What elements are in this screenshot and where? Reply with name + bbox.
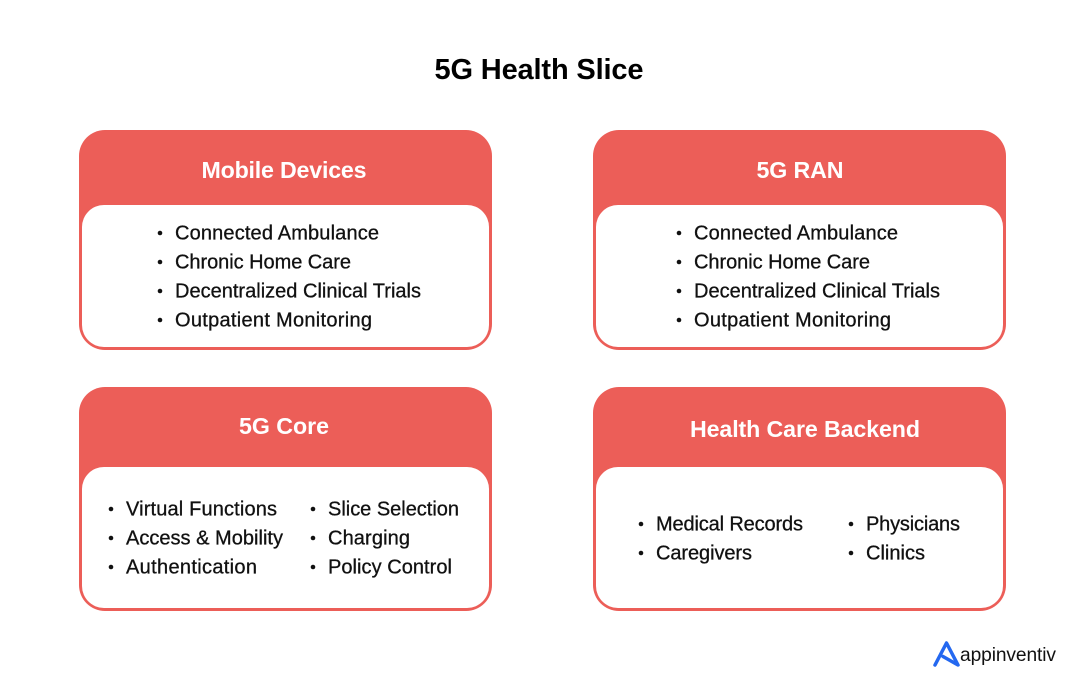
- list: Health Care Backend items: Caregivers: [656, 542, 752, 564]
- heading: 5G RAN: 5G RAN: [756, 157, 844, 183]
- list: Health Care Backend items: Clinics: [866, 542, 925, 564]
- panel: Health Care Backend: [593, 387, 1006, 611]
- icon: logo mark: [935, 643, 958, 665]
- list: Health Care Backend items: Medical Records: [656, 514, 803, 536]
- list: 5G Core items: Slice Selection: [328, 498, 459, 520]
- list: Mobile Devices items: Decentralized Clinical Trials: [175, 280, 421, 302]
- list: 5G Core items: [109, 498, 459, 578]
- list: 5G RAN items: Connected Ambulance: [694, 222, 898, 244]
- title: 5G Health Slice: [434, 54, 644, 86]
- list: Health Care Backend items: [639, 514, 960, 564]
- list: Mobile Devices items: Chronic Home Care: [175, 252, 351, 274]
- list: Health Care Backend items: Physicians: [866, 514, 960, 536]
- list: 5G Core items: Charging: [328, 528, 410, 550]
- list: 5G RAN items: Outpatient Monitoring: [694, 310, 891, 332]
- logo: appinventiv: [935, 643, 1056, 666]
- list: 5G Core items: Authentication: [126, 556, 257, 578]
- list: 5G RAN items: Decentralized Clinical Trials: [694, 280, 940, 302]
- heading: Mobile Devices: Mobile Devices: [202, 157, 366, 183]
- panel: 5G RAN: [593, 130, 1006, 350]
- list: 5G Core items: Access & Mobility: [126, 528, 283, 550]
- list: 5G RAN items: Chronic Home Care: [694, 252, 870, 274]
- logo wordmark: appinventiv: [960, 645, 1056, 666]
- list: Mobile Devices items: Outpatient Monitoring: [175, 310, 372, 332]
- list: Mobile Devices items: [158, 222, 421, 332]
- list: 5G RAN items: [677, 222, 940, 332]
- panel: 5G Core: [79, 387, 492, 611]
- heading: Health Care Backend: Health Care Backend: [690, 416, 920, 442]
- list: 5G Core items: Policy Control: [328, 556, 452, 578]
- list: 5G Core items: Virtual Functions: [126, 498, 277, 520]
- list: Mobile Devices items: Connected Ambulance: [175, 222, 379, 244]
- heading: 5G Core: 5G Core: [239, 413, 329, 439]
- panel: Mobile Devices: [79, 130, 492, 350]
